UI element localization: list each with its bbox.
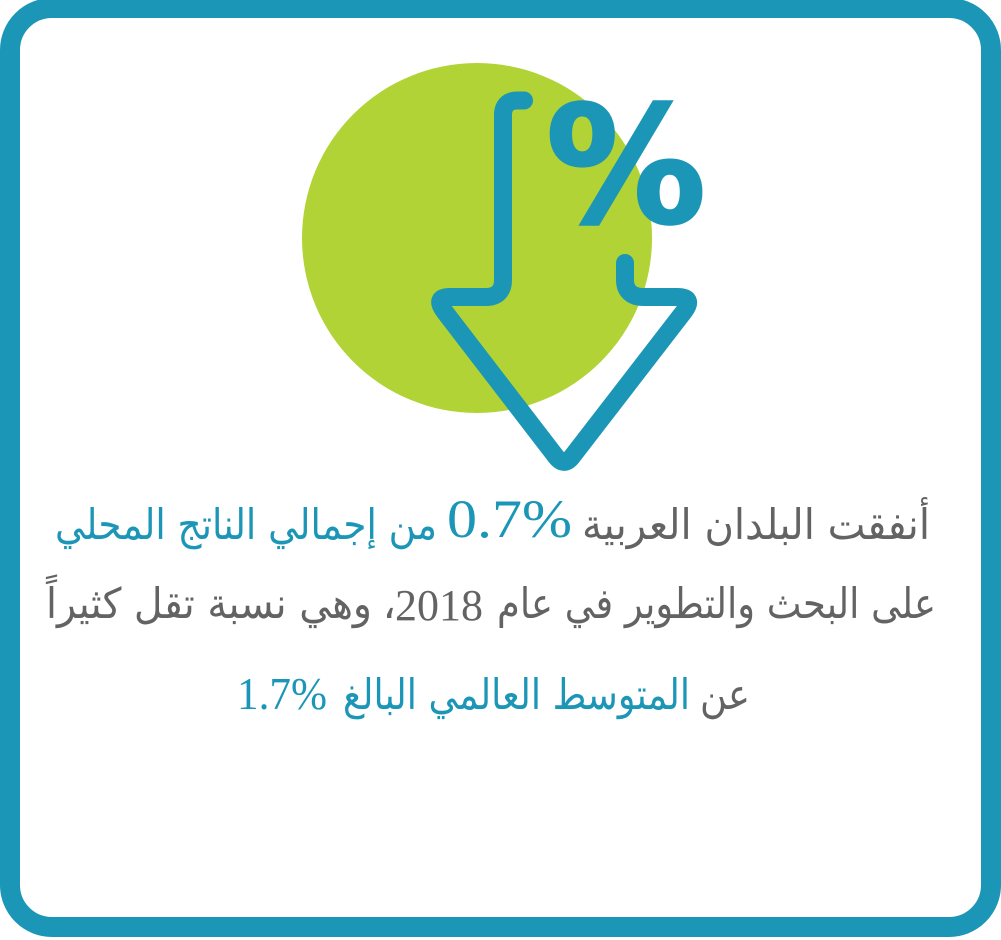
icon: percent sign: %	[546, 73, 706, 261]
text line 3: المتوسط العالمي البالغ	[343, 670, 690, 720]
text line 1: 0.7%	[447, 489, 572, 549]
text line 2	[45, 574, 936, 630]
icon: down arrow outline	[440, 100, 688, 462]
icon: green circle	[302, 63, 652, 413]
text line 1: أنفقت البلدان العربية	[582, 497, 930, 549]
text line 2: ،	[382, 579, 396, 628]
text line 1: من إجمالي الناتج المحلي	[55, 500, 437, 550]
text line 1	[55, 489, 930, 550]
text line 3: عن	[700, 670, 750, 719]
text line 2: وهي نسبة تقل كثيراً	[45, 574, 372, 629]
text block: description	[45, 489, 936, 720]
text line 3: 1.7%	[237, 668, 327, 719]
text line 2: على البحث والتطوير في عام	[497, 579, 936, 629]
text line 2: 2018	[395, 581, 483, 630]
